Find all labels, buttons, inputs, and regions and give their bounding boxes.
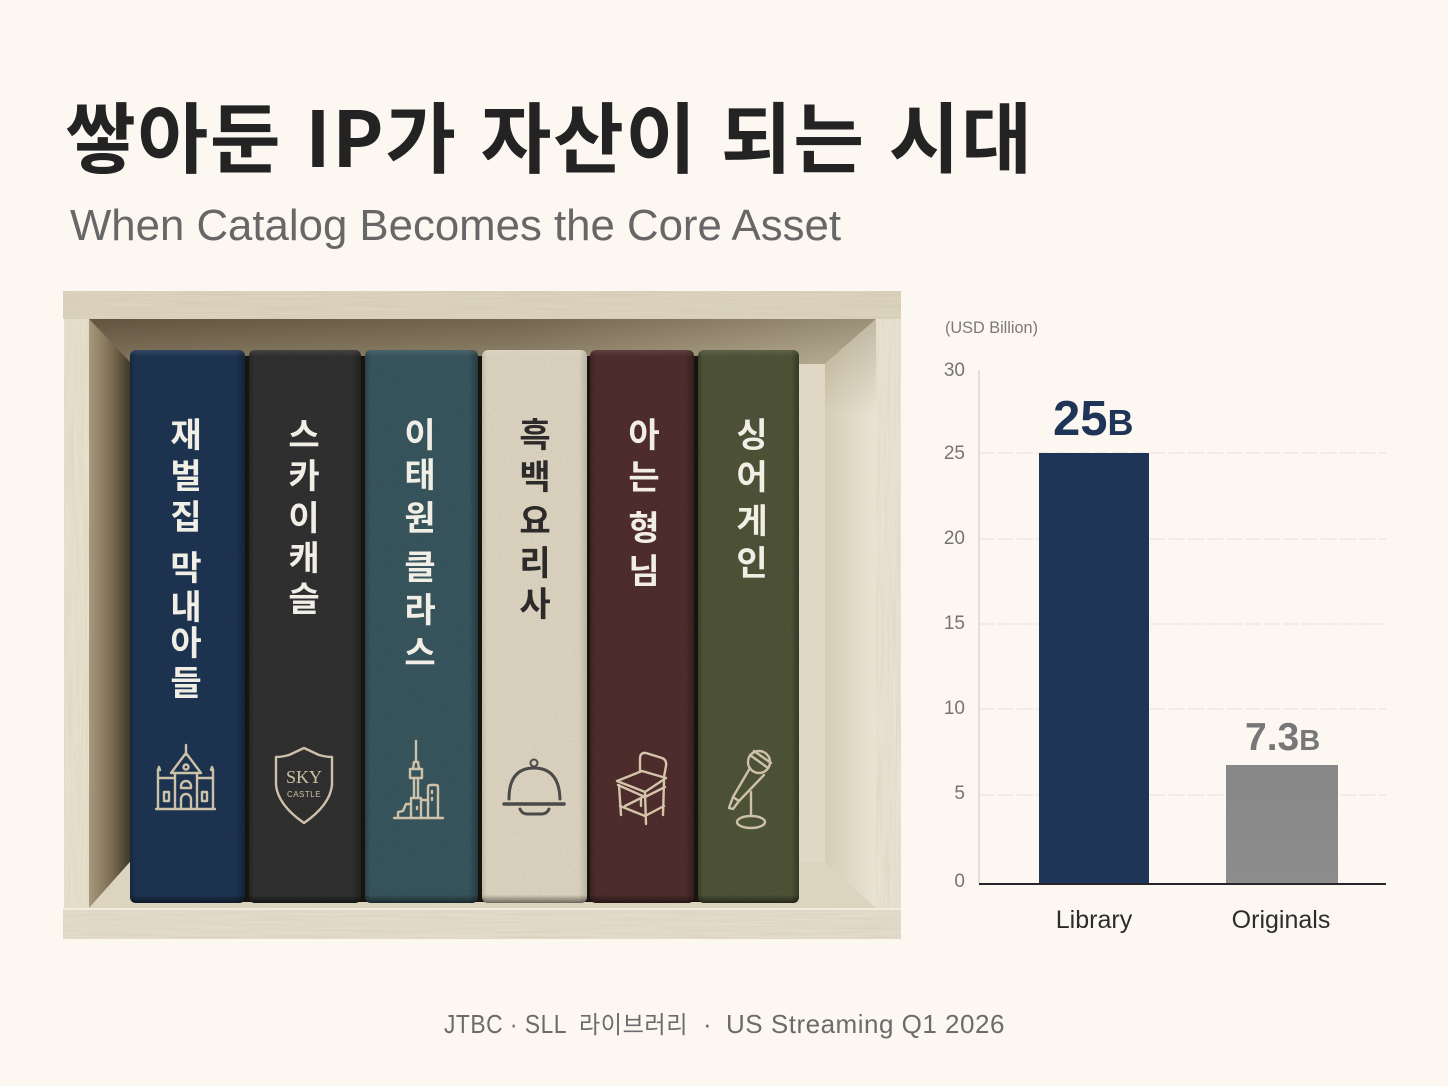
footer source line: JTBC · SLL — [444, 1009, 567, 1039]
subtitle: When Catalog Becomes the Core Asset — [70, 201, 841, 250]
footer source line: US Streaming Q1 2026 — [726, 1009, 1005, 1039]
panel: bookshelf — [63, 291, 901, 939]
shelf right post — [876, 319, 901, 908]
y axis tick labels — [944, 360, 965, 892]
panel: bar chart — [944, 318, 1386, 934]
axis unit label: (USD Billion) — [945, 318, 1038, 337]
bar: Library — [1039, 453, 1149, 884]
spine title: 재벌집 막내아들 — [170, 408, 202, 705]
y axis tick labels: 10 — [944, 698, 965, 719]
book: 싱어게인 — [698, 350, 799, 903]
book: 재벌집 막내아들 — [130, 350, 245, 903]
y axis tick labels: 0 — [954, 871, 965, 892]
footer source line: 라이브러리 — [579, 1012, 688, 1039]
footer source line — [444, 1009, 1005, 1039]
icon: school chair — [617, 753, 666, 824]
shelf bottom board — [63, 908, 901, 939]
icon: SKY CASTLE shield — [276, 748, 332, 823]
spine title: 스카이캐슬 — [288, 408, 320, 621]
icon: mansion — [156, 745, 215, 809]
shelf back wall — [89, 319, 876, 908]
shelf ceiling — [89, 319, 876, 364]
y axis tick labels: 25 — [944, 443, 965, 464]
category label: Originals: Originals — [1232, 906, 1330, 934]
icon: Seoul tower skyline — [394, 741, 443, 818]
icon: SKY CASTLE shield: CASTLE — [287, 790, 321, 799]
spine title: 아는 형님 — [628, 408, 660, 593]
value label: Originals: 7.3B — [1245, 716, 1320, 759]
title: 쌓아둔 IP가 자산이 되는 시대 — [65, 79, 1032, 190]
shelf right inner side — [825, 319, 876, 908]
icon: cloche — [504, 760, 564, 814]
bar: Originals — [1226, 765, 1338, 884]
spine title: 싱어게인 — [736, 408, 768, 585]
x axis baseline — [979, 883, 1386, 885]
shelf left post — [64, 319, 89, 908]
icon: microphone — [729, 751, 771, 828]
value label: Library: 25B — [1053, 392, 1134, 446]
shelf left inner side — [89, 319, 130, 908]
spine title: 흑백요리사 — [519, 408, 551, 626]
y axis tick labels: 30 — [944, 360, 965, 381]
book: 아는 형님 — [590, 350, 694, 903]
y axis tick labels: 5 — [954, 783, 965, 804]
footer source line: · — [703, 1009, 712, 1039]
y axis gridlines — [979, 370, 1386, 884]
y axis tick labels: 20 — [944, 528, 965, 549]
book: 이태원 클라스 — [365, 350, 478, 903]
book: 스카이캐슬 — [249, 350, 361, 903]
icon: SKY CASTLE shield: SKY — [286, 767, 322, 787]
book: 흑백요리사 — [482, 350, 587, 903]
spine title: 이태원 클라스 — [404, 408, 436, 675]
shelf top board — [63, 291, 901, 319]
y axis tick labels: 15 — [944, 613, 965, 634]
shadow between books — [132, 356, 797, 902]
shelf floor — [89, 862, 876, 908]
category label: Library: Library — [1056, 906, 1133, 934]
